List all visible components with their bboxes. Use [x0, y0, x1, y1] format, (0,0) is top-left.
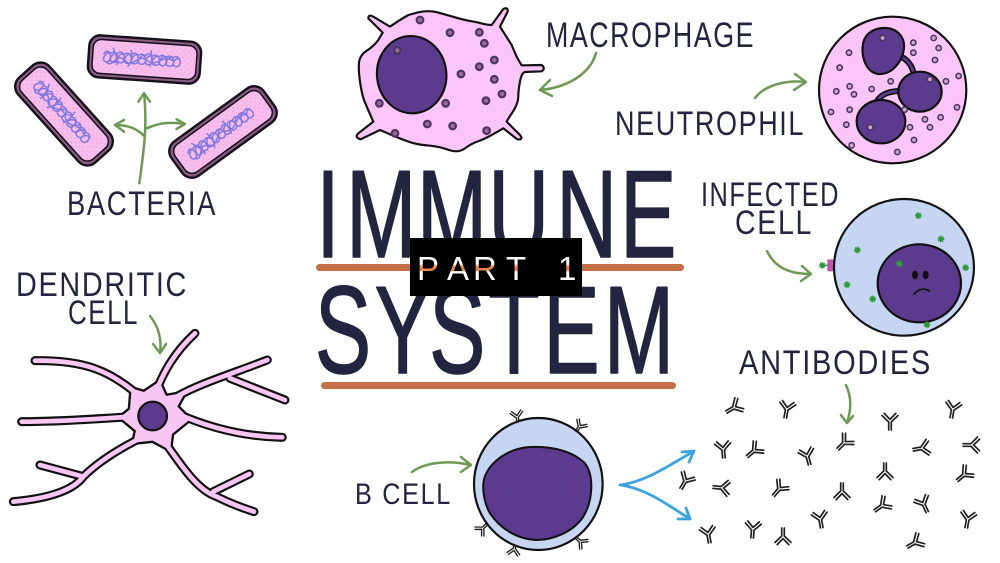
nucleus	[138, 402, 167, 430]
panel: bacteria	[10, 35, 281, 223]
label: b cell: B CELL	[355, 478, 452, 511]
panel: antibodies	[674, 344, 980, 554]
icon: dendritic cell	[13, 333, 285, 512]
panel: macrophage	[357, 8, 755, 151]
panel: dendritic cell	[13, 266, 285, 512]
badge: part 1: PART1	[417, 250, 576, 287]
arrow: to infected cell	[767, 251, 811, 281]
nucleus	[373, 33, 450, 117]
arrow: to macrophage	[540, 53, 596, 96]
nucleus with sad face	[878, 244, 961, 322]
title: immune: IMMUNE	[316, 146, 676, 284]
icon: bacterium top	[87, 35, 202, 84]
panel: neutrophil	[615, 17, 966, 163]
icon: infected cell	[820, 199, 974, 336]
label: neutrophil: NEUTROPHIL	[615, 105, 805, 143]
icon: bacterium left	[10, 58, 118, 170]
nucleus	[483, 447, 591, 540]
label: infected cell: INFECTED	[701, 176, 840, 214]
virus particles	[820, 213, 968, 327]
title divider bar one	[316, 264, 684, 271]
label: bacteria: BACTERIA	[67, 185, 217, 223]
label: infected cell: CELL	[735, 204, 813, 242]
label: dendritic cell: DENDRITIC	[16, 266, 188, 304]
icon: neutrophil cell	[819, 17, 966, 163]
arrow: to dendritic cell	[150, 316, 166, 353]
arrows: bacteria pointers	[115, 93, 185, 183]
title: system: SYSTEM	[315, 262, 674, 400]
arrow: to antibodies	[841, 385, 853, 423]
vesicles	[376, 17, 505, 137]
arrow: to neutrophil	[755, 74, 806, 98]
label: dendritic cell: CELL	[68, 294, 139, 332]
antibodies cloud	[674, 397, 980, 554]
granules	[828, 35, 961, 155]
badge: part 1	[410, 238, 582, 296]
multi-lobed nucleus	[857, 28, 942, 143]
icon: macrophage cell	[357, 8, 544, 151]
icon: b cell	[474, 410, 603, 556]
panel: b cell	[355, 410, 694, 556]
arrow: to b cell	[412, 457, 471, 472]
title divider bar two	[321, 382, 676, 389]
arrows: blue split	[620, 451, 694, 519]
label: macrophage: MACROPHAGE	[546, 16, 755, 55]
panel: infected cell	[701, 176, 974, 336]
label: antibodies: ANTIBODIES	[739, 344, 932, 382]
icon: bacterium right	[165, 82, 281, 182]
